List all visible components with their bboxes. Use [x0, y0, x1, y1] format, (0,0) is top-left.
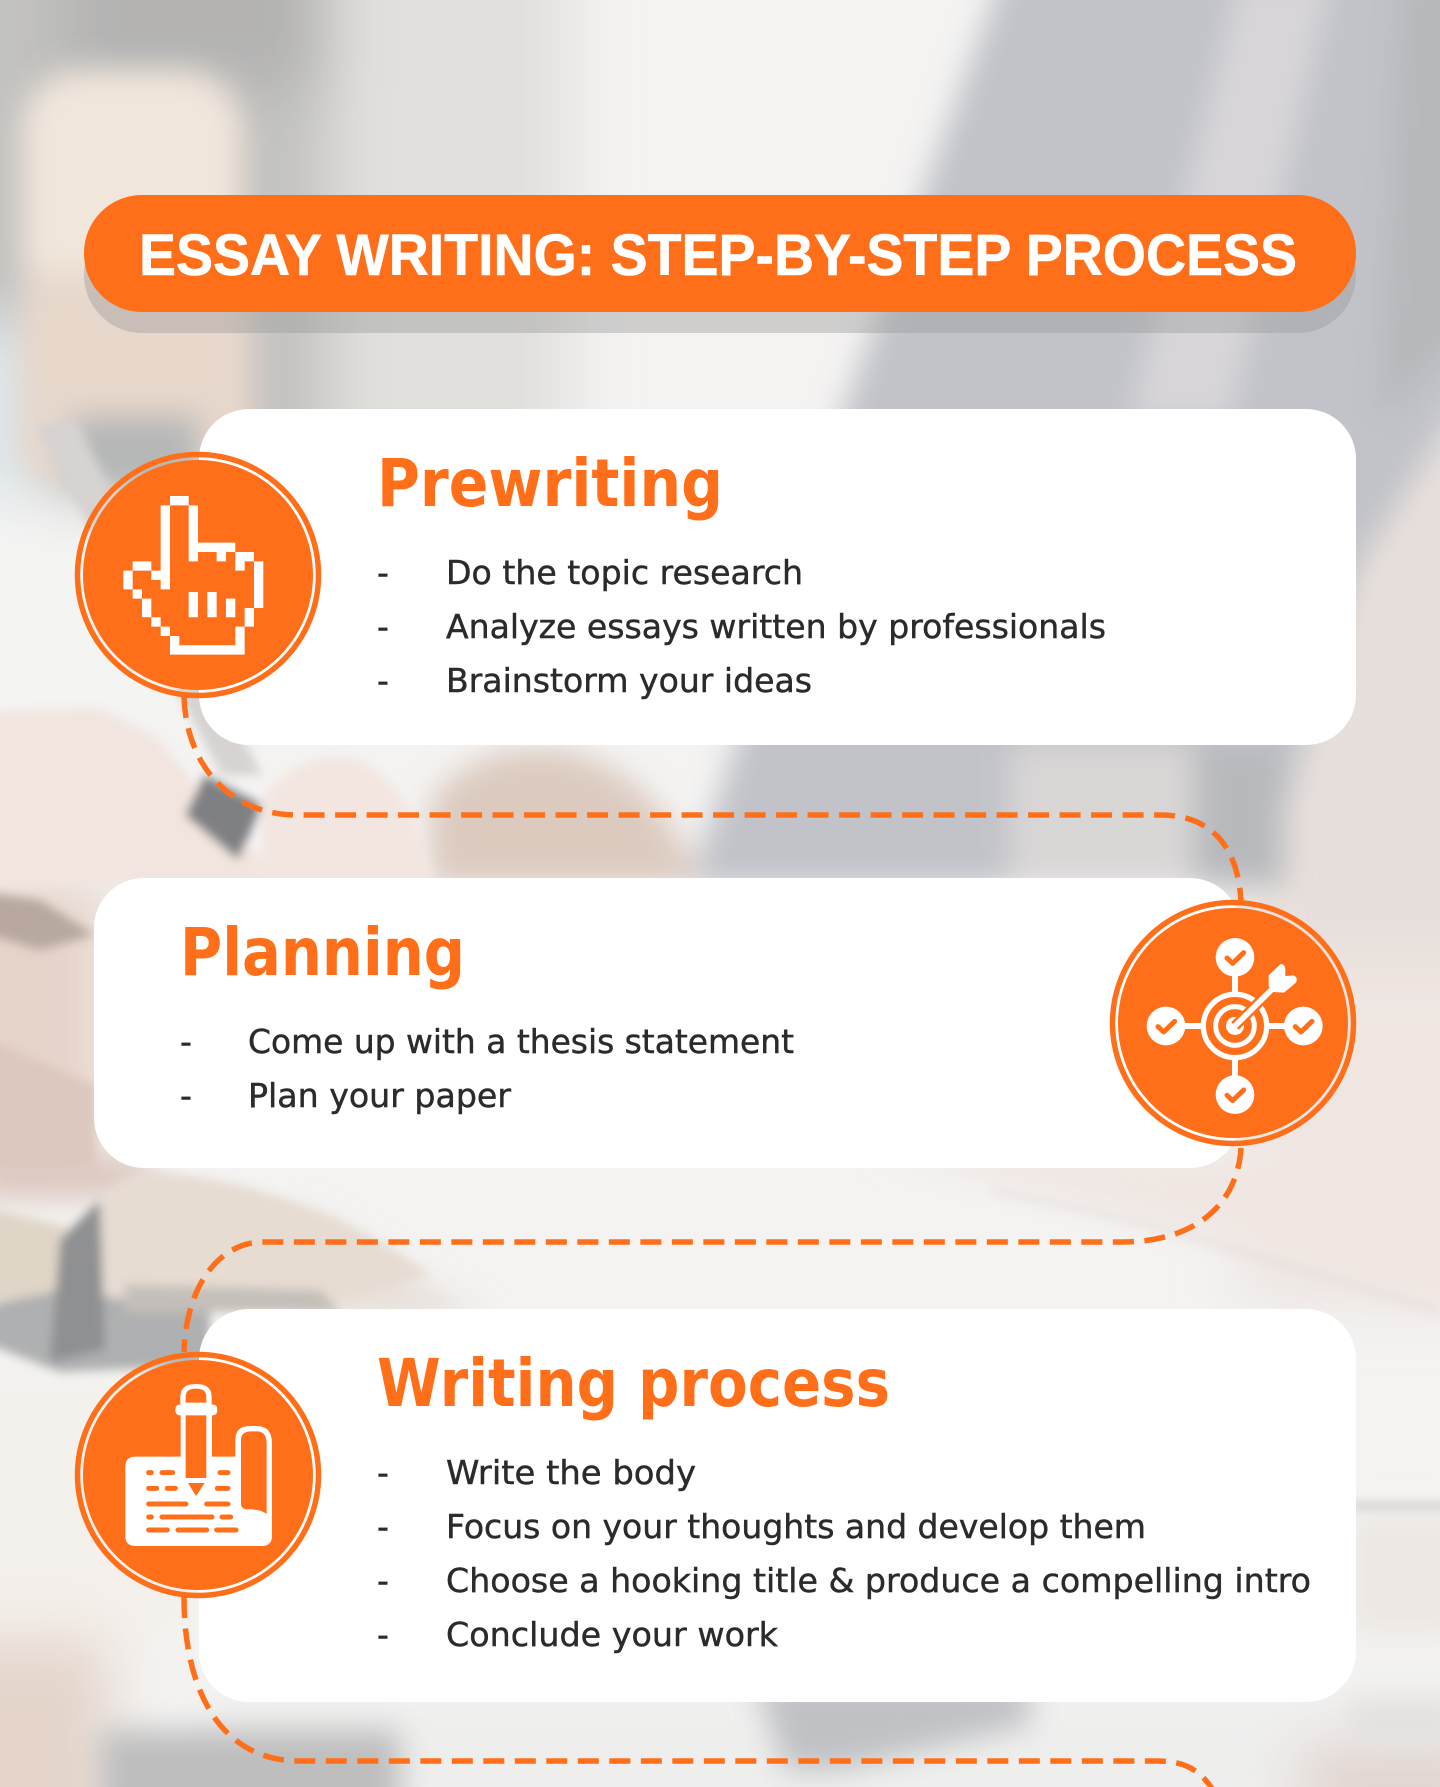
icon: target with checkmarks	[1112, 902, 1354, 1144]
prewriting list: Do the topic research	[446, 553, 803, 592]
writing process list: -	[377, 1507, 389, 1546]
writing process list: Conclude your work	[446, 1615, 779, 1654]
panel: writing process card	[199, 1309, 1356, 1702]
panel: prewriting card	[199, 409, 1356, 745]
writing process list: -	[377, 1615, 389, 1654]
icon: pen writing on scroll	[78, 1354, 318, 1596]
writing process list: Choose a hooking title & produce a compelling intro	[446, 1561, 1311, 1600]
prewriting list: Brainstorm your ideas	[446, 661, 812, 700]
planning list: -	[180, 1022, 192, 1061]
writing process list: Write the body	[446, 1453, 696, 1492]
planning list: Come up with a thesis statement	[248, 1022, 794, 1061]
dashed connector path	[184, 697, 1241, 1787]
panel: planning card	[94, 878, 1240, 1168]
writing process list	[377, 1453, 1311, 1654]
prewriting list	[377, 553, 1106, 700]
writing process list: Focus on your thoughts and develop them	[446, 1507, 1146, 1546]
heading: planning: Planning	[180, 914, 465, 991]
prewriting list: -	[377, 607, 389, 646]
prewriting list: Analyze essays written by professionals	[446, 607, 1106, 646]
title text: ESSAY WRITING: STEP-BY-STEP PROCESS	[139, 223, 1297, 288]
writing process list: -	[377, 1561, 389, 1600]
title banner	[84, 195, 1356, 333]
heading: prewriting: Prewriting	[377, 445, 723, 522]
planning list	[180, 1022, 794, 1115]
heading: writing process: Writing process	[377, 1345, 890, 1422]
writing process list: -	[377, 1453, 389, 1492]
icon: pixel pointing hand	[78, 454, 318, 696]
planning list: -	[180, 1076, 192, 1115]
prewriting list: -	[377, 553, 389, 592]
planning list: Plan your paper	[248, 1076, 511, 1115]
prewriting list: -	[377, 661, 389, 700]
